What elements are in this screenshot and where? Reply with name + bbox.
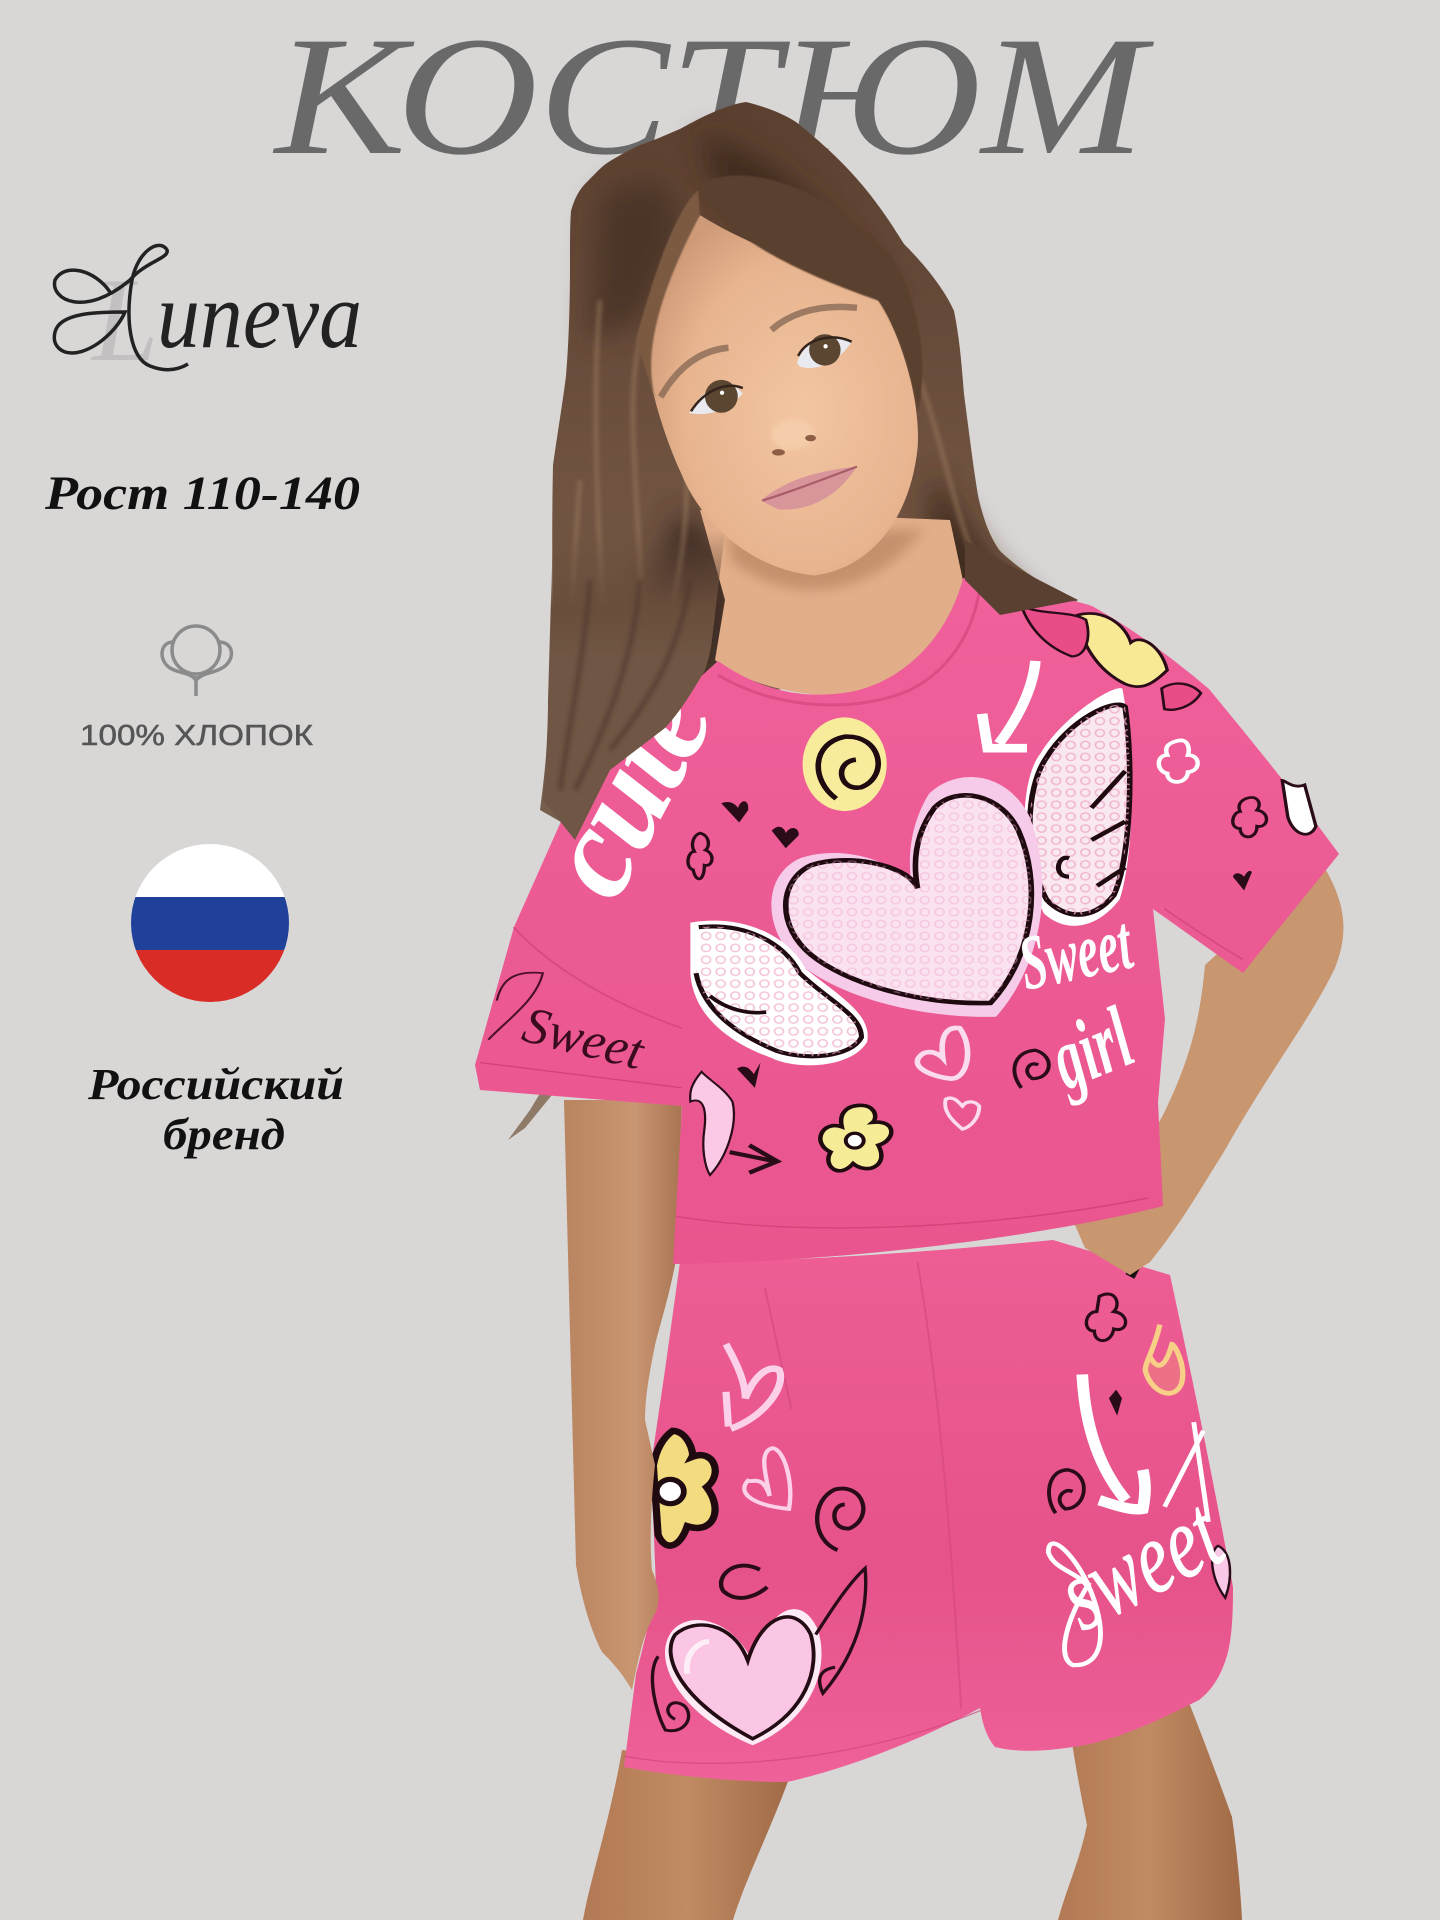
sweet script flourish bbox=[1048, 1422, 1208, 1665]
white flower bbox=[1159, 740, 1198, 782]
eyebrows bbox=[771, 307, 857, 330]
title: КОСТЮМ bbox=[273, 2, 1155, 190]
shirt lettering girl: girl bbox=[1036, 989, 1146, 1109]
right arm bbox=[1075, 860, 1343, 1275]
hair wisp bbox=[508, 1085, 552, 1140]
sleeve wing bbox=[488, 973, 543, 1040]
left eye bbox=[689, 380, 743, 414]
right hand fingers bbox=[1082, 1206, 1185, 1272]
dark flowers bbox=[1233, 797, 1266, 837]
brand logo: L bbox=[90, 253, 159, 386]
neck shadow bbox=[730, 530, 925, 589]
left leg bbox=[583, 1750, 792, 1920]
right sleeve ring bbox=[1282, 780, 1316, 834]
t-shirt bbox=[475, 578, 1339, 1264]
height range: Рост 110-140 bbox=[44, 467, 360, 520]
brand logo bbox=[54, 245, 362, 386]
left wing bbox=[690, 921, 868, 1065]
shirt lettering cute: cute bbox=[513, 661, 742, 919]
russian brand caption: бренд bbox=[163, 1110, 285, 1159]
shirt print bbox=[480, 606, 1316, 1228]
big heart bbox=[786, 795, 1031, 1003]
photo: girl in pink outfit bbox=[475, 102, 1343, 1920]
heart outlines bbox=[917, 1028, 968, 1079]
nose bbox=[771, 420, 816, 456]
skin bbox=[643, 215, 918, 576]
sleeve lettering: Sweet bbox=[517, 996, 651, 1082]
icon: russian flag bbox=[131, 843, 289, 1003]
dark swirl bbox=[1014, 1050, 1049, 1088]
top yellow heart bbox=[1077, 613, 1167, 687]
neck and chest bbox=[700, 510, 965, 696]
yellow flower bbox=[653, 1431, 715, 1546]
icon: cotton bbox=[162, 626, 231, 696]
hair strands over shoulder bbox=[560, 580, 690, 790]
shorts print bbox=[624, 1262, 1230, 1763]
back hair bbox=[540, 102, 1078, 830]
brand logo: uneva bbox=[157, 264, 362, 368]
right hair over shirt bbox=[965, 540, 1078, 615]
front hair over shoulder bbox=[543, 530, 725, 840]
mouth bbox=[761, 467, 857, 510]
white arrow bbox=[982, 661, 1035, 748]
face bbox=[636, 175, 922, 576]
hair shading bbox=[590, 135, 1040, 720]
heart with arrow bbox=[690, 1072, 734, 1175]
hair strands bbox=[560, 300, 975, 790]
shorts lettering: sweet bbox=[1040, 1474, 1241, 1652]
shorts bbox=[624, 1240, 1241, 1782]
big heart bbox=[665, 1609, 822, 1745]
yellow swirl bbox=[803, 717, 887, 811]
collar bbox=[718, 585, 980, 705]
right eye bbox=[797, 334, 852, 368]
left arm and hand bbox=[564, 1100, 682, 1690]
right wing bbox=[1025, 688, 1132, 926]
cotton label: 100% ХЛОПОК bbox=[80, 720, 313, 752]
fringe bbox=[696, 175, 922, 411]
waist tag bbox=[1125, 1251, 1147, 1279]
shirt lettering sweet: Sweet bbox=[1011, 898, 1140, 1007]
right leg bbox=[1058, 1690, 1242, 1920]
small flower outline bbox=[1086, 1294, 1126, 1341]
big heart shadow bbox=[771, 777, 1042, 1017]
yellow flower bbox=[820, 1105, 891, 1171]
russian brand caption: Российский bbox=[87, 1060, 344, 1109]
small dark hearts bbox=[721, 801, 1252, 1088]
